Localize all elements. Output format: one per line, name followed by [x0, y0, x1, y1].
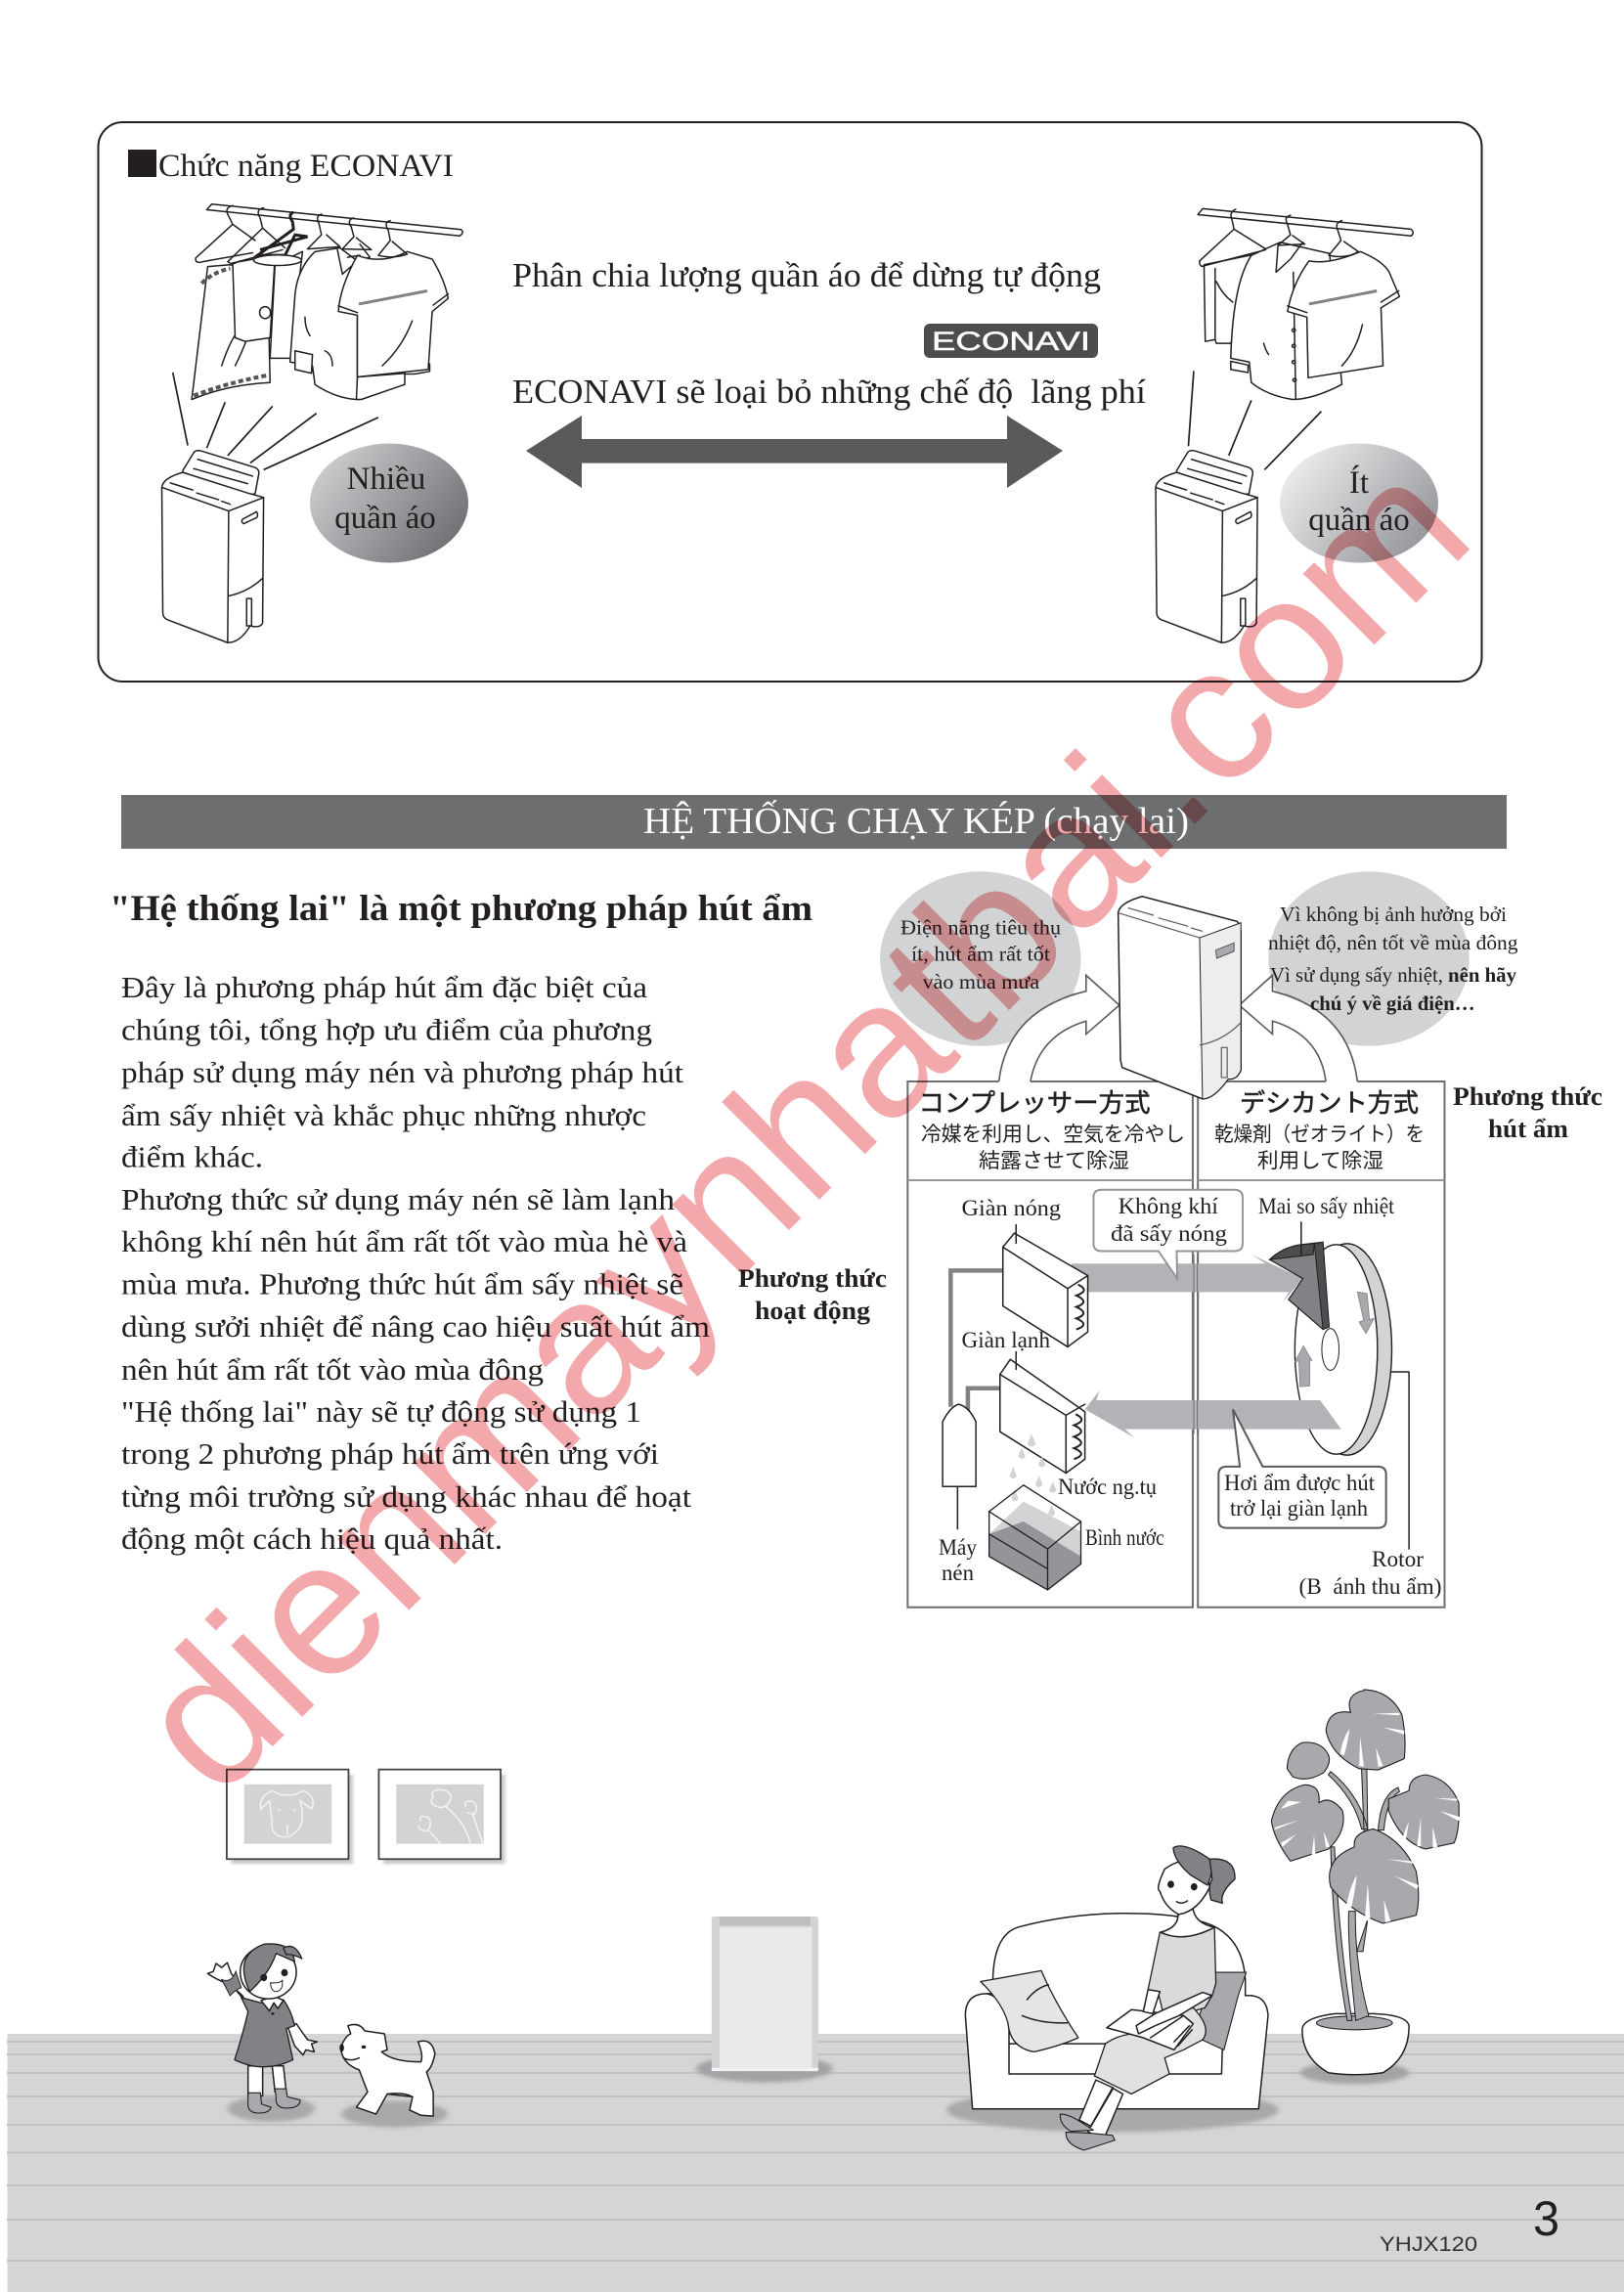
section header bar: HỆ THỐNG CHẠY KÉP (chạy lai) [643, 799, 1189, 842]
bubbles and curved arrows [880, 871, 1470, 1081]
water tank [989, 1502, 1081, 1590]
book [1107, 2009, 1193, 2050]
table headings: Japanese: 乾燥剤（ゼオライト）を [1214, 1124, 1425, 1146]
dehumidifier: right [1156, 451, 1257, 642]
watermark: dienmaynhatbai.com [96, 419, 1508, 1831]
bubble: many clothes: quần áo [334, 501, 436, 536]
stems [1329, 1769, 1399, 2020]
table headings: Japanese: 利用して除湿 [1257, 1150, 1383, 1172]
diagram labels: Mai so sấy nhiệt [1258, 1194, 1395, 1218]
badge: ECONAVI logo: ECONAVI [932, 327, 1090, 356]
bubble text: desiccant: chú ý về giá điện… [1310, 992, 1475, 1015]
leaves [1326, 1690, 1405, 1770]
divider over arrows [1194, 1255, 1198, 1434]
text block: explanation: mùa mưa. Phương thức hút ẩm sấy nhiệt sẽ [121, 1267, 683, 1301]
text block: explanation: pháp sử dụng máy nén và phương pháp hút [121, 1055, 683, 1089]
bubble: many clothes: Nhiều [347, 462, 425, 497]
callout: returning moisture [1218, 1409, 1386, 1528]
arms [1136, 1990, 1212, 2034]
condensation drops [1010, 1434, 1056, 1516]
bubble text: desiccant: Vì sử dụng sấy nhiệt, [1270, 963, 1443, 987]
neck [1161, 1910, 1214, 1937]
table frames [907, 1081, 1444, 1608]
diagram labels: Giàn nóng [962, 1196, 1062, 1220]
illustration: dog [339, 2024, 448, 2128]
text block: explanation: động một cách hiệu quả nhất. [121, 1521, 503, 1556]
diagram labels: Không khí [1119, 1194, 1219, 1218]
table headings: Japanese [919, 1088, 1425, 1172]
bubble text: compressor: vào mùa mưa [923, 970, 1040, 993]
diagram labels: Giàn lạnh [962, 1328, 1050, 1352]
illustration: girl [207, 1944, 317, 2122]
bubble text: compressor: ít, hút ẩm rất tốt [911, 943, 1050, 966]
bubble text: desiccant [1268, 903, 1518, 1015]
heading: hybrid system: "Hệ thống lai" là một phương pháp hút ẩm [110, 889, 812, 929]
diagram labels [939, 1194, 1441, 1599]
upper heat exchanger [1003, 1233, 1088, 1346]
signal lines: left [173, 373, 378, 469]
label: operating method: Phương thức [738, 1264, 887, 1293]
bubble text: compressor: Điện năng tiêu thụ [900, 915, 1062, 939]
bubble text: compressor [900, 915, 1062, 993]
diagram labels: đã sấy nóng [1111, 1221, 1228, 1246]
diagram labels: (B ánh thu ẩm) [1298, 1574, 1441, 1599]
label: operating method: hoạt động [755, 1297, 870, 1325]
panel: ECONAVI function [98, 122, 1482, 682]
table headings: Japanese: 冷媒を利用し、空気を冷やし [921, 1124, 1185, 1146]
footer: page number: 3 [1533, 2191, 1559, 2246]
diagram labels: Máy [939, 1535, 977, 1560]
heading: ECONAVI function: Chức năng ECONAVI [158, 149, 454, 184]
rotation arrows [1295, 1292, 1374, 1387]
illustration: few clothes on a rail [1188, 208, 1413, 469]
footer: model code: YHJX120 [1380, 2233, 1477, 2256]
illustration: many clothes on a rail [192, 204, 462, 400]
diagram labels: trở lại giàn lạnh [1230, 1496, 1368, 1521]
text: clothes amount: Phân chia lượng quần áo để dừng tự động [512, 256, 1101, 294]
badge: ECONAVI logo [924, 324, 1098, 358]
text block: explanation: chúng tôi, tổng hợp ưu điểm của phương [121, 1013, 652, 1047]
rotor [1302, 1244, 1392, 1455]
text block: explanation: điểm khác. [121, 1140, 263, 1174]
table headings: Japanese: デシカント方式 [1240, 1088, 1419, 1118]
table headings: Japanese: 結露させて除湿 [979, 1150, 1129, 1172]
text block: explanation: ẩm sấy nhiệt và khắc phục những nhược [121, 1098, 646, 1132]
bubble: many clothes [310, 444, 468, 563]
diagram labels: Bình nước [1085, 1525, 1164, 1550]
leaf slits [1274, 1713, 1460, 1922]
text block: explanation: trong 2 phương pháp hút ẩm trên ứng với [121, 1436, 659, 1471]
label: operating method [738, 1264, 887, 1325]
arrow: double headed [526, 416, 1063, 488]
sofa [965, 1914, 1268, 2109]
diagram labels: Rotor [1372, 1547, 1424, 1571]
compressor [943, 1404, 976, 1486]
text block: explanation: Phương thức sử dụng máy nén sẽ làm lạnh [121, 1182, 676, 1216]
bubble text: desiccant: Vì không bị ảnh hưởng bởi [1280, 903, 1507, 926]
bubble: few clothes: Ít [1349, 464, 1369, 501]
text block: explanation: không khí nên hút ẩm rất tốt vào mùa hè và [121, 1224, 687, 1258]
label: dehumidifying method [1453, 1082, 1602, 1143]
hair [1173, 1846, 1211, 1885]
dehumidifier: left [162, 451, 264, 642]
mechanism drawing [943, 1190, 1409, 1590]
table headings: Japanese: コンプレッサー方式 [919, 1088, 1150, 1118]
illustration: monstera plant [1271, 1690, 1460, 2084]
diagram labels: Nước ng.tụ [1058, 1475, 1157, 1499]
pot [1302, 2013, 1409, 2075]
text block: explanation: Đây là phương pháp hút ẩm đặc biệt của [121, 970, 647, 1004]
illustration: air purifier [696, 1917, 833, 2083]
text block: explanation [121, 970, 710, 1556]
section header bar [121, 795, 1507, 849]
floor [7, 2034, 1624, 2292]
callout: heated air [1093, 1190, 1243, 1279]
illustration: woman on sofa [946, 1846, 1279, 2150]
air flow arrows [1072, 1255, 1341, 1437]
text block: explanation: dùng sưởi nhiệt để nâng cao hiệu suất hút ẩm [121, 1309, 710, 1344]
face [1159, 1860, 1209, 1915]
label: dehumidifying method: Phương thức [1453, 1082, 1602, 1111]
text block: explanation: nên hút ẩm rất tốt vào mùa đông [121, 1352, 544, 1387]
legs [1079, 2080, 1122, 2141]
picture frames [227, 1770, 505, 1864]
rotor leader [1392, 1372, 1409, 1549]
diagram labels: Hơi ẩm được hút [1224, 1471, 1376, 1495]
text block: explanation: từng môi trường sử dụng khác nhau để hoạt [121, 1479, 691, 1514]
shoes [1060, 2114, 1115, 2150]
dehumidifier: centre [1119, 897, 1241, 1099]
bubble: few clothes: quần áo [1308, 503, 1410, 538]
lower heat exchanger [1000, 1359, 1085, 1474]
left cushion [981, 1970, 1078, 2051]
text: ECONAVI removes waste: ECONAVI sẽ loại bỏ những chế độ lãng phí [512, 373, 1146, 411]
right cushion [1193, 1972, 1247, 2050]
heater [1270, 1242, 1329, 1330]
bubble text: desiccant: nên hãy [1448, 963, 1516, 987]
bubble: few clothes [1280, 444, 1438, 563]
bubble text: desiccant: nhiệt độ, nên tốt về mùa đông [1268, 931, 1518, 954]
text block: explanation: "Hệ thống lai" này sẽ tự động sử dụng 1 [121, 1394, 641, 1429]
diagram labels: nén [942, 1561, 974, 1585]
refrigerant pipes [950, 1270, 1003, 1412]
label: dehumidifying method: hút ẩm [1488, 1115, 1568, 1143]
diagram: compressor and desiccant comparison [880, 871, 1518, 1608]
skirt [1094, 2007, 1206, 2094]
top [1148, 1927, 1216, 2020]
